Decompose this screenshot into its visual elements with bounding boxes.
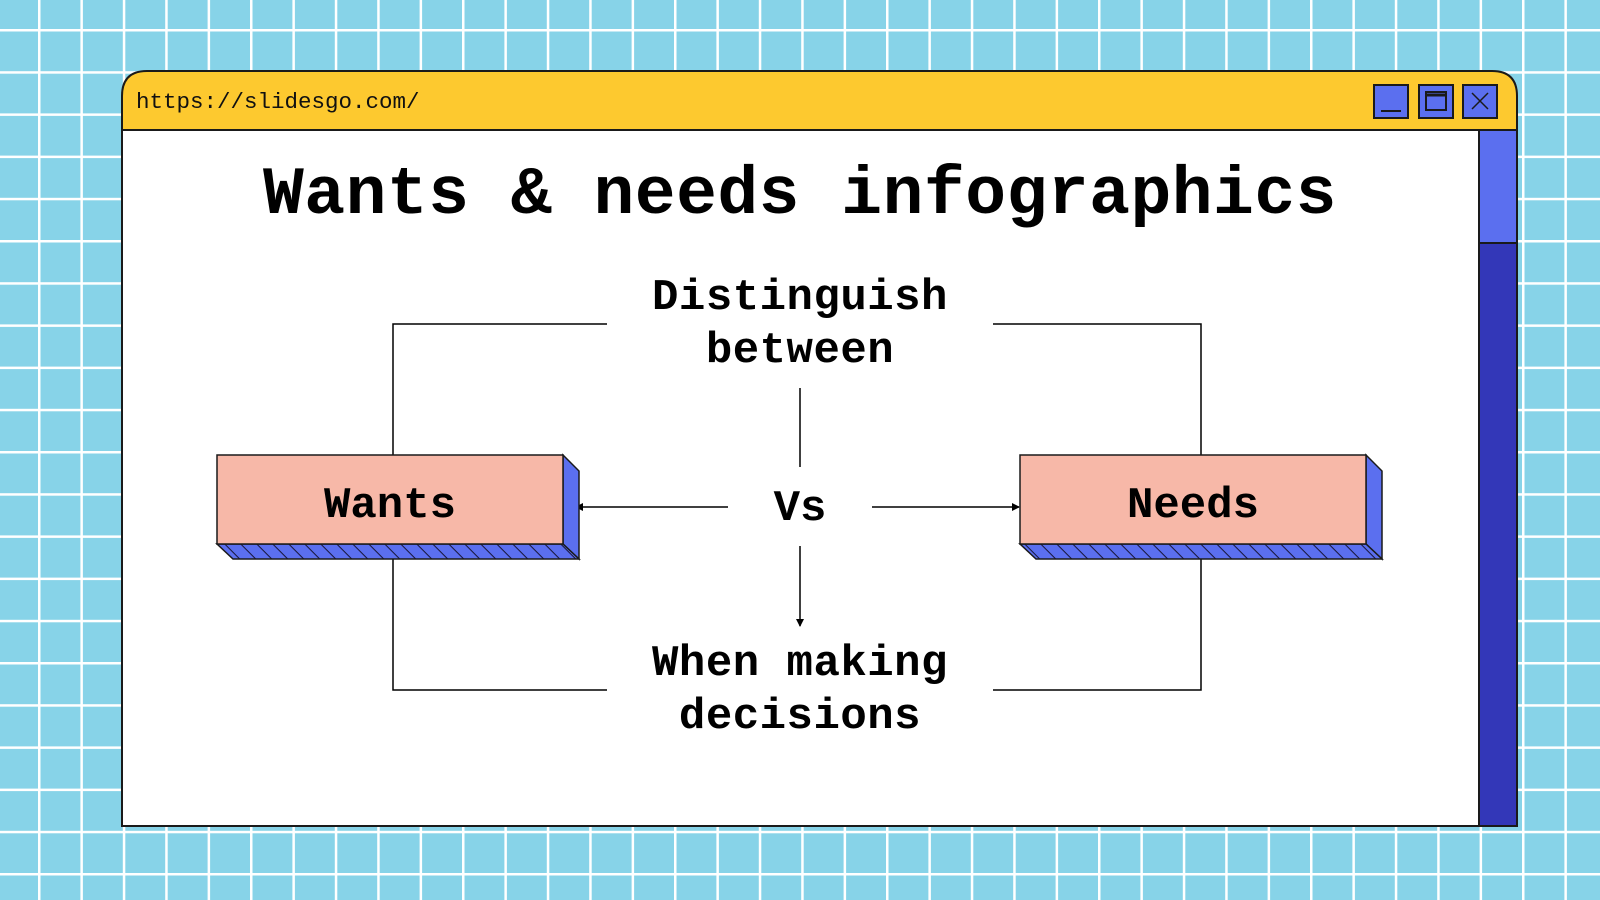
scrollbar <box>1479 130 1517 826</box>
arrows <box>576 507 1019 626</box>
text: when making decisions: decisions <box>679 692 921 742</box>
browser window <box>122 71 1517 826</box>
box: needs: Needs <box>1127 481 1259 531</box>
text: vs: Vs <box>774 484 826 534</box>
box: wants: Wants <box>324 481 456 531</box>
connector lines <box>393 324 1201 690</box>
title: Wants & needs infographics <box>263 157 1337 234</box>
text: distinguish between: Distinguish <box>652 273 948 323</box>
box: needs <box>1020 455 1382 559</box>
text: distinguish between: between <box>706 326 894 376</box>
url text: https://slidesgo.com/ <box>136 89 420 115</box>
text: when making decisions: When making <box>652 639 948 689</box>
box: wants <box>217 455 579 559</box>
window buttons <box>1374 85 1497 118</box>
